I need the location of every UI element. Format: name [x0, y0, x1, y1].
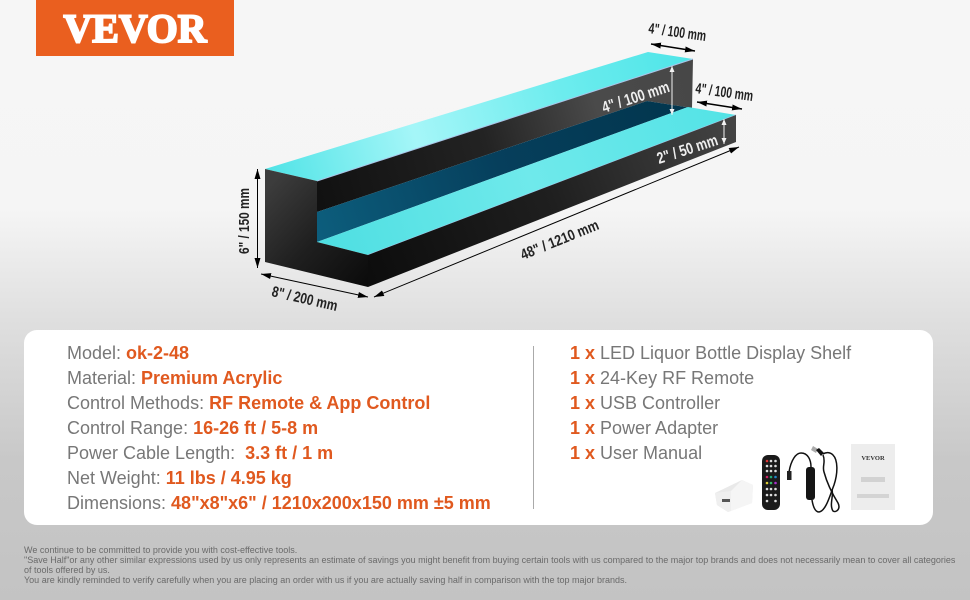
product diagram: shelf with dimensions: [236, 20, 754, 315]
text block: package contents: 1 x USB Controller: [570, 393, 720, 413]
text block: specifications: Control Range: 16-26 ft / 5-8 m: [67, 418, 318, 438]
dimension labels: [236, 20, 754, 315]
icon: accessories: [715, 444, 895, 513]
dimension arrows: [258, 44, 742, 297]
text block: specifications: Dimensions: 48"x8"x6" / 1210x200x150 mm ±5 mm: [67, 493, 491, 513]
text block: package contents: 1 x 24-Key RF Remote: [570, 368, 754, 388]
disclaimer: "Save Half"or any other similar expressions used by us only represents an estimate of savings you might benefit from buying certain tools with us compared to the major top brands and does not necessarily mean to cover all categories: [24, 555, 955, 565]
text block: package contents: 1 x Power Adapter: [570, 418, 718, 438]
disclaimer: We continue to be committed to provide you with cost-effective tools.: [24, 545, 297, 555]
dimension labels: 6" / 150 mm: [236, 188, 253, 254]
logo: VEVOR: VEVOR: [64, 6, 208, 51]
text block: specifications: [67, 343, 491, 513]
logo: VEVOR: [36, 0, 234, 56]
text block: specifications: Material: Premium Acrylic: [67, 368, 282, 388]
disclaimer: of tools offered by us.: [24, 565, 110, 575]
divider: [533, 346, 534, 509]
text block: package contents: [570, 343, 852, 463]
icon: power adapter: [715, 480, 753, 512]
text block: package contents: 1 x LED Liquor Bottle Display Shelf: [570, 343, 851, 363]
icon: USB controller and cable: [787, 446, 839, 512]
dimension labels: 4" / 100 mm: [694, 80, 754, 105]
text block: specifications: Power Cable Length: 3.3 ft / 1 m: [67, 443, 333, 463]
icon: user manual: VEVOR: [861, 455, 885, 462]
text block: specifications: Control Methods: RF Remote & App Control: [67, 393, 430, 413]
dimension labels: 2" / 50 mm: [655, 132, 720, 168]
icon: user manual: [851, 444, 895, 510]
disclaimer: You are kindly reminded to verify carefully when you are placing an order with us if you are actually saving half in comparison with the top major brands.: [24, 575, 627, 585]
disclaimer: [24, 545, 955, 585]
text block: package contents: 1 x User Manual: [570, 443, 702, 463]
dimension labels: 8" / 200 mm: [270, 283, 339, 315]
text block: specifications: Model: ok-2-48: [67, 343, 189, 363]
dimension labels: 4" / 100 mm: [600, 79, 672, 117]
panel: specifications and package contents: [24, 330, 933, 525]
text block: specifications: Net Weight: 11 lbs / 4.95 kg: [67, 468, 292, 488]
shelf body: [265, 52, 736, 287]
dimension labels: 4" / 100 mm: [647, 20, 707, 45]
icon: remote: [762, 455, 780, 510]
dimension labels: 48" / 1210 mm: [518, 217, 601, 264]
